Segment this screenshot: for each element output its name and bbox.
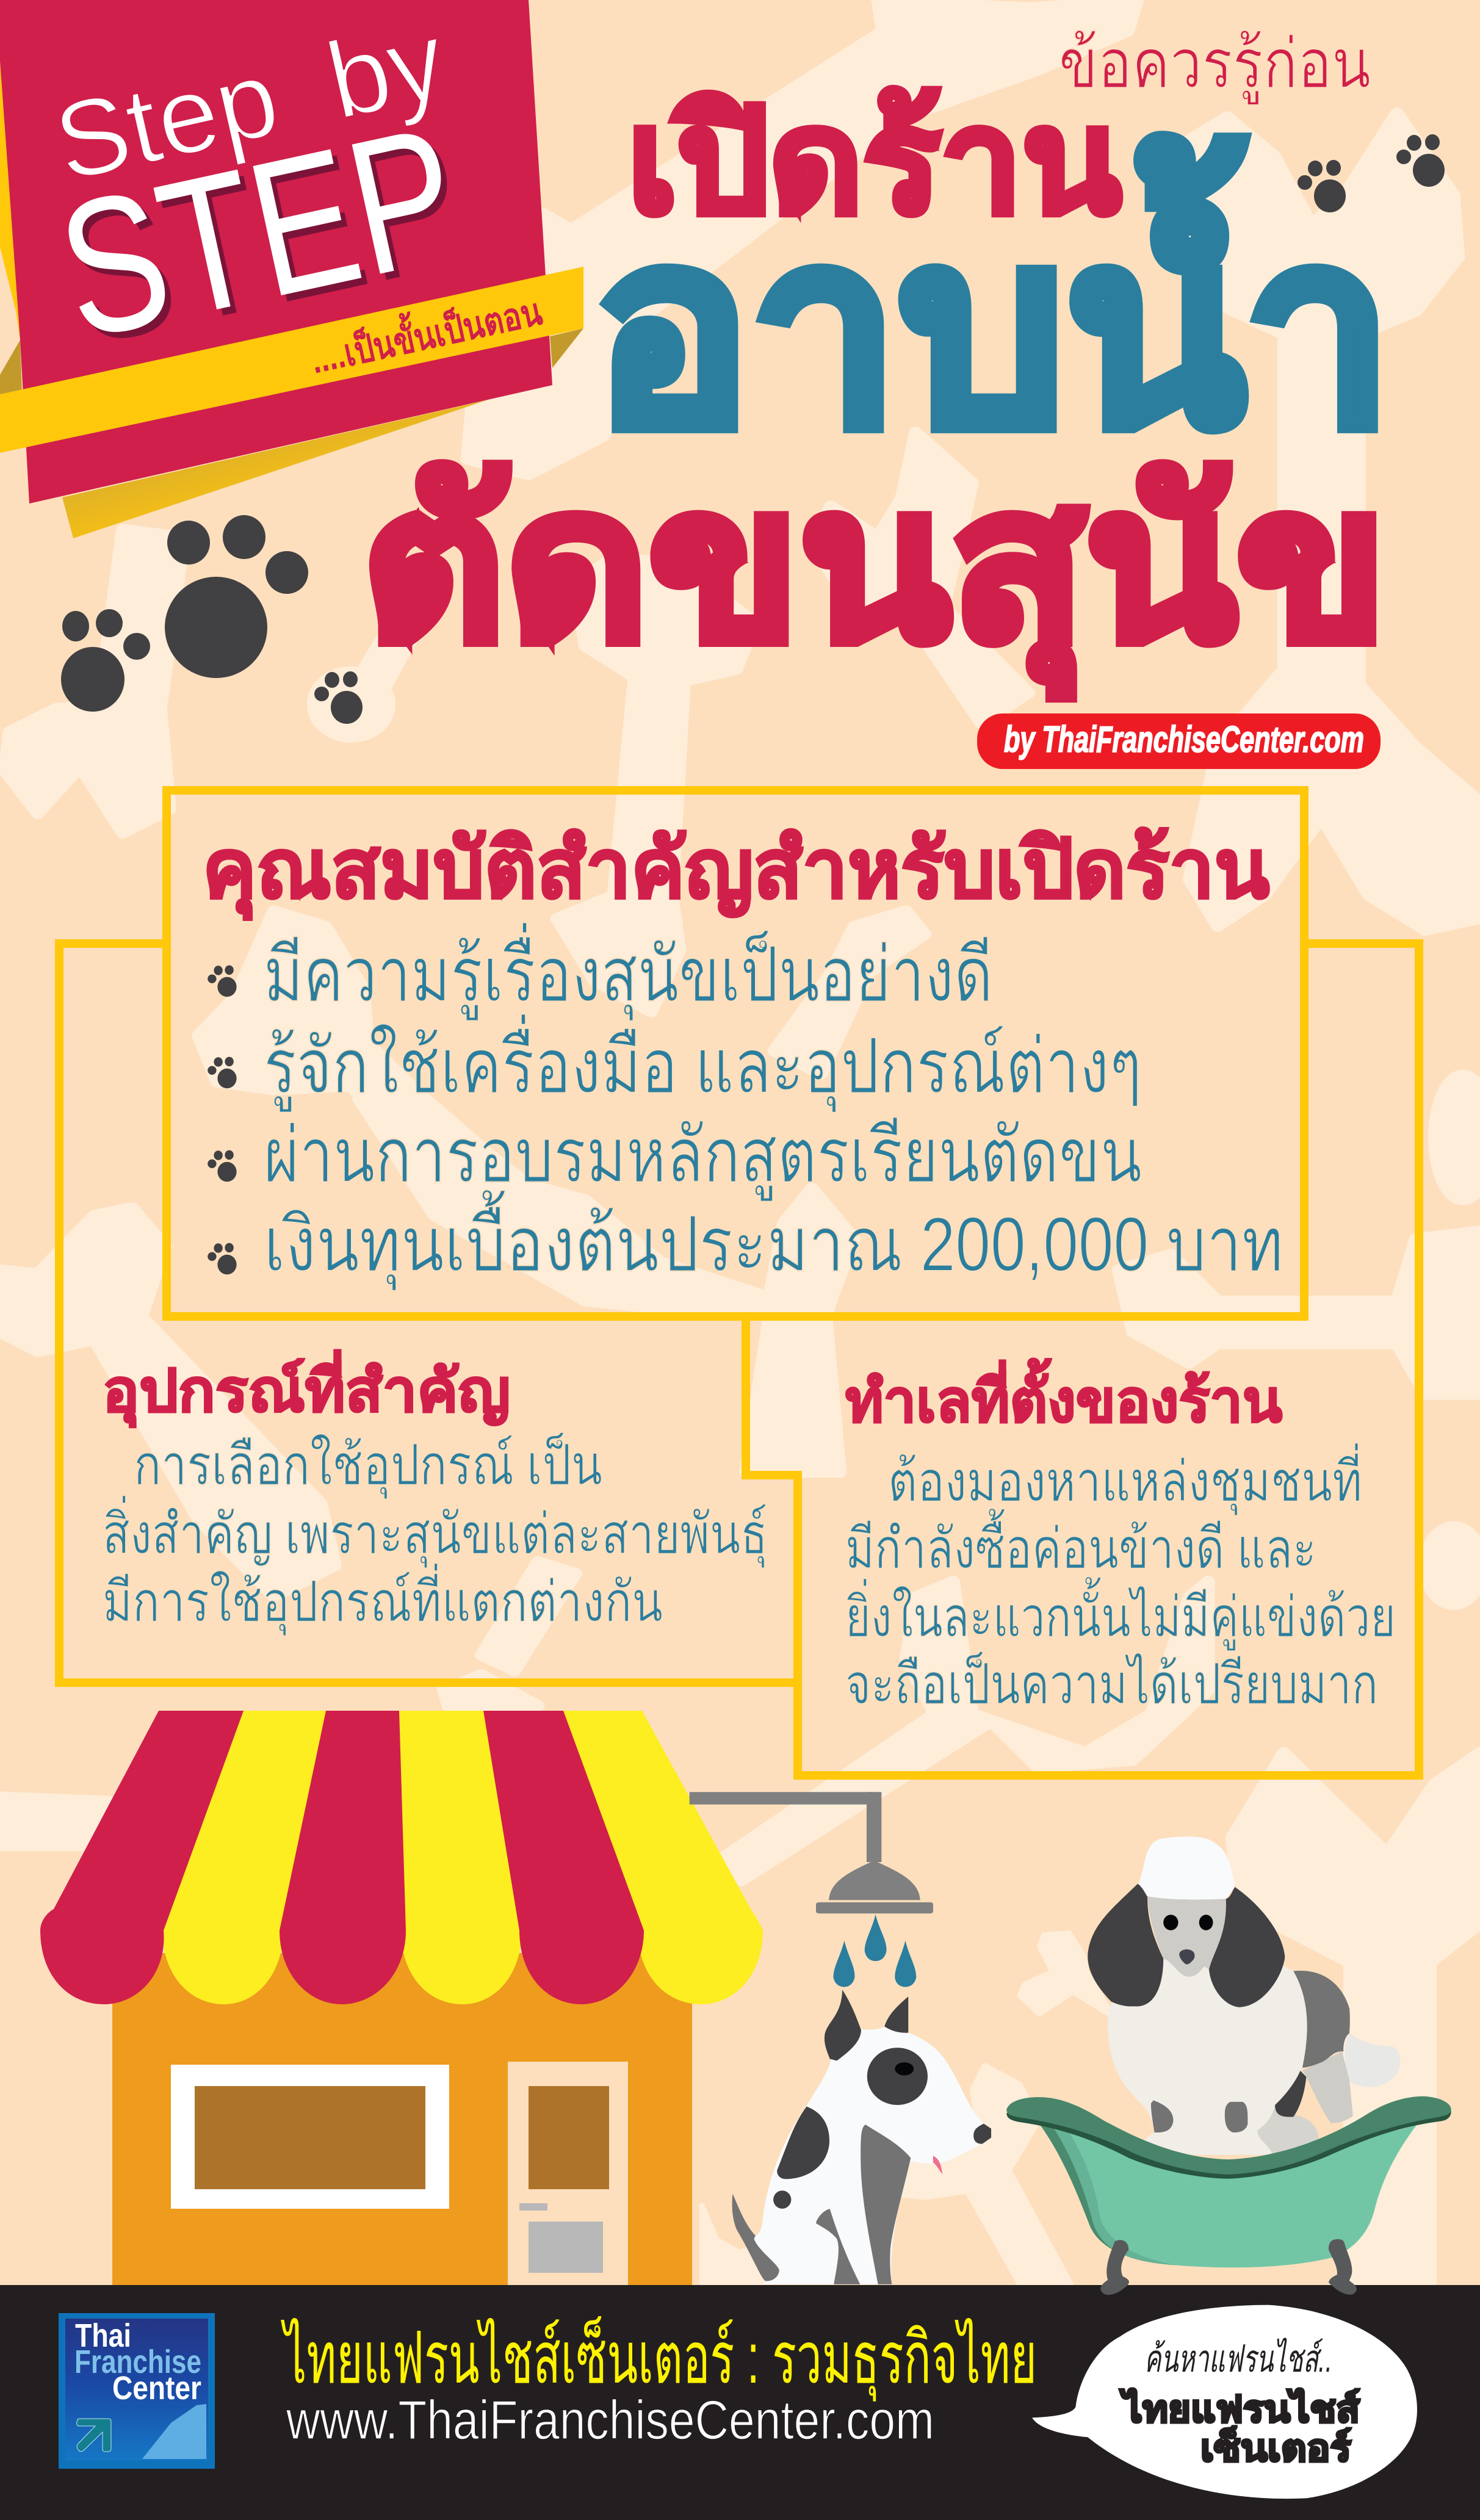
water drops <box>833 1915 916 1987</box>
logo: Franchise <box>74 2344 201 2380</box>
nose <box>1179 1949 1194 1965</box>
body text <box>845 1443 1396 1716</box>
tail <box>732 2193 779 2281</box>
banner fold shadow <box>62 400 488 538</box>
title line 2: อาบน้ำ <box>593 136 1393 480</box>
bubble bold line 2: เซ็นเตอร์ <box>1200 2426 1351 2469</box>
logo arrow <box>77 2419 111 2452</box>
tub shading <box>1039 2124 1179 2265</box>
item 2: รู้จักใช้เครื่องมือ และอุปกรณ์ต่างๆ <box>264 1014 1142 1113</box>
logo <box>59 2313 215 2469</box>
shop illustration <box>40 1711 763 2285</box>
body spots <box>777 2107 829 2179</box>
bullet 4 <box>208 1243 237 1274</box>
tail <box>1345 2034 1400 2087</box>
medium paw <box>61 609 150 712</box>
bullet 3 <box>208 1150 237 1182</box>
tub rim shadow <box>1006 2111 1451 2179</box>
ears <box>1088 1884 1163 2006</box>
bubble bold line 1: ไทยแฟรนไชส์ <box>1119 2388 1360 2430</box>
shop door <box>508 2062 628 2285</box>
heading: ทำเลที่ตั้งของร้าน <box>845 1358 1282 1434</box>
top paw left <box>1298 160 1346 212</box>
awning yellow stripes <box>162 1711 763 2004</box>
shop window <box>171 2065 449 2209</box>
ears <box>825 1990 861 2061</box>
tongue <box>933 2156 942 2174</box>
body text: มีการใช้อุปกรณ์ที่แตกต่างกัน <box>103 1563 663 1636</box>
footer url: www.ThaiFranchiseCenter.com <box>286 2390 934 2451</box>
tub rim <box>1006 2096 1451 2175</box>
shower <box>690 1792 933 1987</box>
body text: มีกำลังซื้อค่อนข้างดี และ <box>845 1508 1316 1580</box>
body text: การเลือกใช้อุปกรณ์ เป็น <box>134 1432 602 1500</box>
panel: equipment <box>103 1349 768 1636</box>
bullet list <box>208 922 1283 1291</box>
heading: คุณสมบัติสำคัญสำหรับเปิดร้าน <box>203 824 1269 920</box>
leg marks <box>1151 2100 1173 2132</box>
eye patch <box>867 2048 928 2105</box>
heading: อุปกรณ์ที่สำคัญ <box>103 1349 510 1428</box>
bullet 1 <box>208 966 237 997</box>
step by step banner <box>0 0 583 538</box>
frame: lower panels <box>59 944 1419 1775</box>
spotted dog <box>732 1990 991 2284</box>
bubble script line: ค้นหาแฟรนไชส์.. <box>1144 2338 1332 2380</box>
logo wordmark: Thai <box>75 2317 131 2354</box>
large paw <box>165 515 308 678</box>
speech bubble <box>1032 2305 1417 2499</box>
item 1: มีความรู้เรื่องสุนัขเป็นอย่างดี <box>264 922 993 1021</box>
yellow ribbon <box>0 267 583 453</box>
item 3: ผ่านการอบรมหลักสูตรเรียนตัดขน <box>264 1113 1142 1202</box>
nose <box>973 2124 991 2144</box>
awning red stripes <box>40 1711 644 2004</box>
body text <box>103 1432 768 1636</box>
panel: location <box>845 1358 1396 1716</box>
back patch <box>1293 1971 1350 2068</box>
paw prints <box>61 134 1445 724</box>
gray legs <box>861 2125 911 2284</box>
red banner <box>0 0 552 504</box>
dog body <box>754 2026 991 2284</box>
shower head <box>829 1860 920 1900</box>
poodle <box>1088 1836 1400 2155</box>
panel: qualifications <box>203 824 1283 1291</box>
byline pill <box>977 713 1381 769</box>
logo book shape <box>142 2404 206 2459</box>
frame: qualification panel <box>167 790 1304 1316</box>
face <box>1147 1895 1226 1977</box>
bathtub <box>1006 2096 1451 2267</box>
topknot <box>1139 1836 1235 1899</box>
hind leg <box>1302 2051 1353 2123</box>
shop wall <box>112 1953 692 2285</box>
Step by lettering: Step by <box>44 0 455 204</box>
title line 1: เปิดร้าน <box>627 81 1121 243</box>
subtitle: ข้อควรรู้ก่อน <box>1059 26 1371 105</box>
small paw <box>314 671 363 724</box>
dark leg <box>1275 2071 1306 2117</box>
title line 3: ตัดขนสุนัข <box>362 446 1387 698</box>
body text: ต้องมองหาแหล่งชุมชนที่ <box>888 1443 1362 1516</box>
footer tagline: ไทยแฟรนไชส์เซ็นเตอร์ : รวมธุรกิจไทย <box>281 2316 1037 2402</box>
shower pipe <box>690 1786 874 1810</box>
eyes <box>1163 1915 1179 1930</box>
body <box>1108 1959 1307 2155</box>
footer band <box>0 2285 1480 2520</box>
ribbon caption: ....เป็นขั้นเป็นตอน <box>306 284 546 382</box>
body text: สิ่งสำคัญ เพราะสุนัขแต่ละสายพันธุ์ <box>103 1495 768 1569</box>
bullet 2 <box>208 1057 237 1088</box>
ribbon back folds <box>0 61 20 340</box>
STEP lettering: STEP <box>42 85 475 379</box>
logo: Center <box>112 2370 201 2406</box>
item 4: เงินทุนเบื้องต้นประมาณ 200,000 บาท <box>264 1190 1283 1291</box>
foot <box>1257 2105 1319 2155</box>
top paw right <box>1396 134 1445 187</box>
tub body <box>1039 2124 1417 2267</box>
STEP shadow: STEP <box>48 91 482 385</box>
tub feet <box>1100 2239 1357 2295</box>
